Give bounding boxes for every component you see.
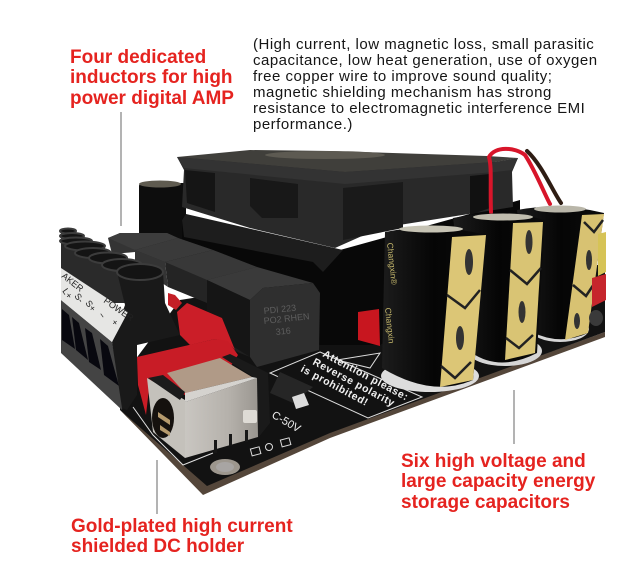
leader line: inductors (120, 112, 122, 226)
text block: inductor description: (High current, low magnetic loss, small parasitic (253, 36, 594, 53)
heat sink (182, 200, 520, 345)
heading: capacitors: Six high voltage and (401, 451, 586, 472)
heading: DC holder: Gold-plated high current (71, 516, 293, 537)
back capacitor (139, 180, 186, 243)
capacitor: right (517, 206, 604, 342)
heading: four dedicated inductors: Four dedicated (70, 47, 206, 68)
text block: inductor description (253, 36, 598, 133)
capacitor: front: Changxin (383, 307, 397, 344)
terminal block: POWER (102, 295, 136, 323)
heading: DC holder: shielded DC holder (71, 536, 244, 557)
terminal block: L+ (60, 286, 74, 301)
terminal block: S+ (83, 298, 98, 313)
text block: inductor description: capacitance, low heat generation, use of oxygen (253, 52, 598, 69)
terminal block (60, 228, 180, 410)
inductors: 316 (275, 325, 291, 337)
capacitor: front (381, 226, 486, 392)
capacitor: front: Changxin® (385, 242, 399, 286)
terminal block: S- (72, 291, 86, 305)
right edge components (589, 232, 606, 326)
heading: DC holder (71, 516, 293, 557)
terminal label strip (61, 268, 128, 342)
text block: inductor description: performance.) (253, 116, 353, 133)
leader line: DC holder (156, 460, 158, 514)
red small block (358, 309, 380, 346)
terminal base with slots (61, 300, 123, 410)
electrolytic capacitors (381, 206, 604, 392)
PCB warning label: C-50V (270, 409, 303, 436)
heading: capacitors: large capacity energy (401, 471, 595, 492)
PCB warning label (250, 348, 422, 456)
heading: four dedicated inductors: inductors for high (70, 67, 233, 88)
terminal block: + (109, 317, 121, 327)
terminal block: − (96, 310, 108, 320)
inductors: PDI 223 (263, 303, 297, 316)
leader line: capacitors (513, 390, 515, 444)
fan wires (489, 149, 561, 212)
inductors: PO2 RHEN (263, 311, 310, 326)
text block: inductor description: magnetic shielding mechanism has strong (253, 84, 552, 101)
PCB warning label: Reverse polarity (311, 356, 397, 410)
terminal posts (61, 231, 142, 303)
text block: inductor description: resistance to electromagnetic interference EMI (253, 100, 585, 117)
DC jack holder (147, 354, 270, 458)
heading: capacitors: storage capacitors (401, 492, 570, 513)
PCB warning label: is prohibited! (299, 363, 370, 409)
terminal block: AKER (60, 271, 86, 294)
heading: four dedicated inductors: power digital AMP (70, 88, 234, 109)
heading: capacitors (401, 451, 596, 513)
circuit board (120, 265, 605, 495)
text block: inductor description: free copper wire to improve sound quality; (253, 68, 552, 85)
PCB warning label: Attention please: (321, 348, 410, 403)
inductors (108, 233, 320, 367)
cooling fan (177, 150, 518, 248)
red film capacitors (137, 293, 238, 415)
heading: four dedicated inductors (70, 47, 234, 109)
capacitor: middle (453, 213, 545, 366)
